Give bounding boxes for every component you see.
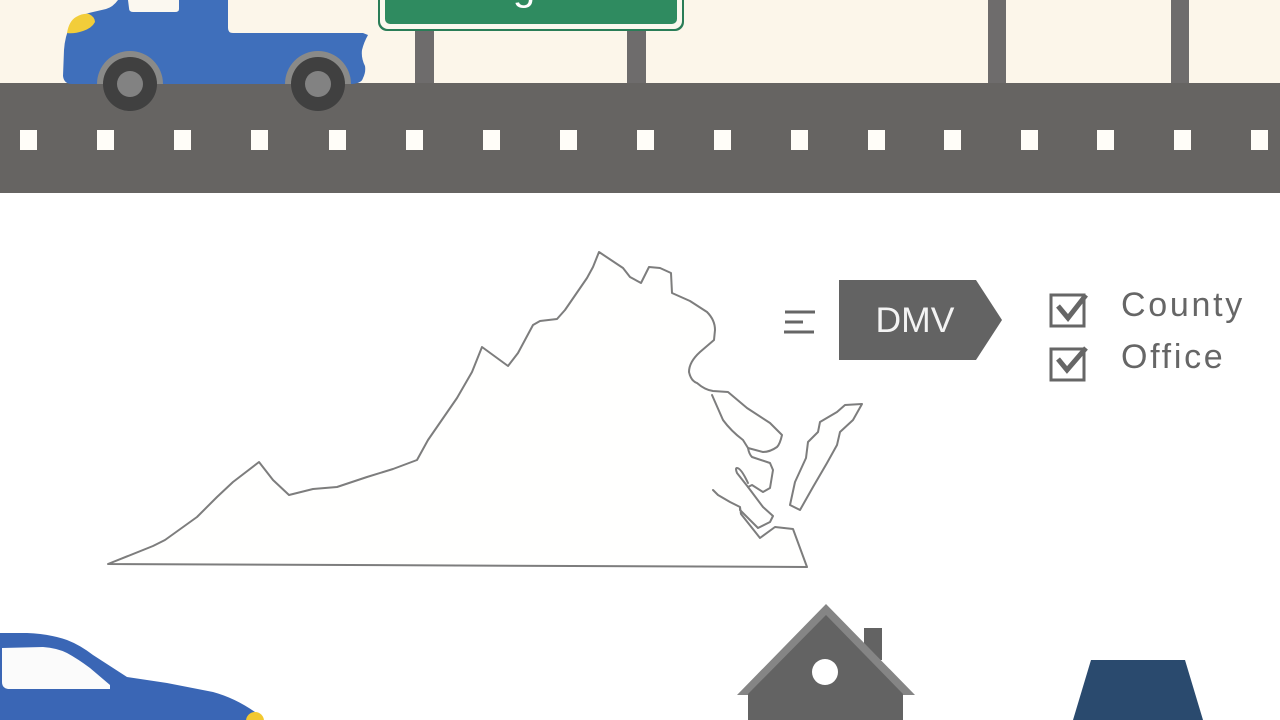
lane markings	[20, 130, 1268, 150]
text: county office	[1121, 286, 1245, 376]
icon: dark blue shape	[1073, 660, 1203, 720]
map: Virginia outline	[108, 252, 862, 567]
icon: text lines	[784, 312, 815, 332]
text: county office: County	[1121, 286, 1245, 324]
panel: road scene	[0, 0, 1280, 193]
map: eastern shore	[790, 404, 862, 510]
icon: checkbox office	[1051, 348, 1086, 380]
map: inlet loop	[736, 468, 748, 487]
callout: DMV arrow tag	[839, 280, 1002, 360]
highway sign	[378, 0, 684, 31]
icon: house	[737, 604, 915, 720]
icon: blue car	[0, 633, 264, 720]
callout: DMV arrow tag: DMV	[876, 300, 955, 340]
icon: checkbox county	[1051, 295, 1086, 326]
icon: pickup truck	[63, 0, 368, 111]
map: inner peninsula line	[712, 395, 748, 448]
sign posts	[415, 0, 1189, 86]
text: county office: Office	[1121, 338, 1225, 376]
background: sky band	[0, 0, 1280, 84]
road	[0, 83, 1280, 193]
